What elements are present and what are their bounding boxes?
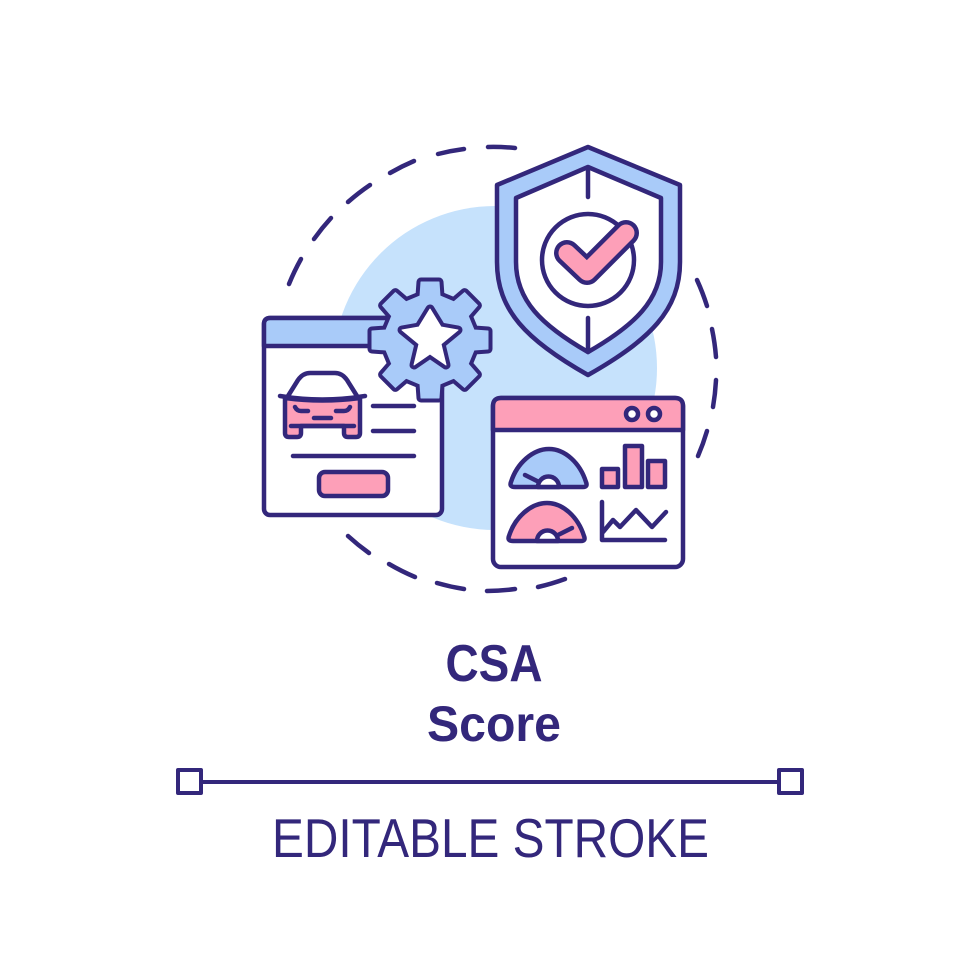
dashed ring (289, 147, 716, 591)
panel: dashboard window (493, 398, 683, 567)
title line 2: Score (427, 696, 561, 752)
title line 1: CSA (446, 635, 542, 693)
star fill (402, 309, 458, 365)
shield outer (497, 147, 680, 375)
stroke handle line (178, 770, 802, 793)
gear fill (372, 282, 488, 398)
car body (285, 398, 360, 437)
panel: car listing window (264, 318, 442, 515)
icon: gear with star (372, 282, 488, 398)
window header (264, 318, 442, 346)
dashboard body (493, 398, 683, 567)
caption: EDITABLE STROKE (272, 807, 709, 869)
bar chart (602, 446, 665, 487)
check mark outline (567, 233, 626, 272)
shield inner (516, 167, 661, 352)
blue gauge (510, 449, 587, 487)
icon: car (280, 373, 365, 437)
car hood line (280, 396, 365, 426)
listing text lines (293, 406, 414, 456)
check mark fill (567, 233, 626, 272)
button (319, 472, 388, 496)
window buttons (626, 408, 638, 420)
dashboard header (493, 398, 683, 430)
background blob (333, 206, 657, 530)
shield ticks (586, 170, 590, 352)
pink gauge (508, 503, 585, 541)
gear outline (372, 282, 488, 398)
check circle (542, 214, 634, 306)
car roof (288, 373, 357, 396)
icon: shield with check (497, 147, 680, 375)
line chart (602, 502, 666, 540)
window body (264, 318, 442, 515)
star outline (402, 309, 458, 365)
